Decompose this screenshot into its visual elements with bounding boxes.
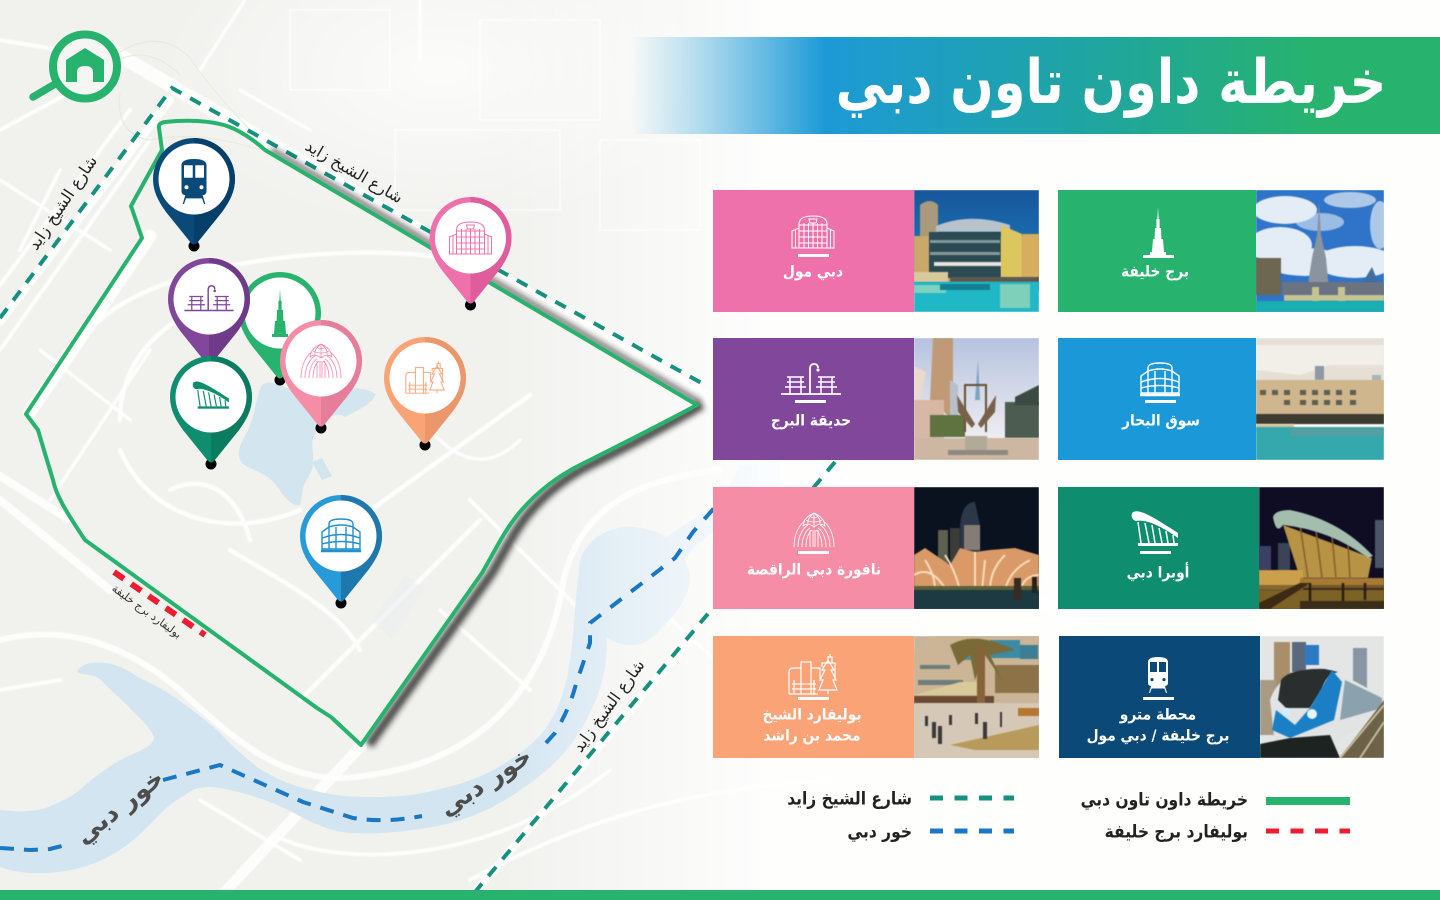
legend: Dubai Creek text: خور دبي [847, 822, 912, 842]
logo: magnifier with house [29, 30, 121, 102]
legend: teal dashes [930, 796, 1014, 800]
title banner [638, 37, 1440, 134]
Dubai Creek dashed route [0, 506, 716, 850]
pin: Dubai Mall [430, 197, 512, 310]
card: Metro station [1059, 636, 1384, 758]
card: Dubai Mall [713, 190, 1039, 312]
photo: Burj Park [914, 338, 1039, 460]
photo: Boulevard [914, 636, 1039, 758]
icon: fountain [794, 512, 834, 547]
water: Dubai creek [0, 462, 780, 873]
photo: Dubai Mall [914, 190, 1039, 312]
photo: Souq Al Bahar [1256, 338, 1384, 460]
photo: Burj Khalifa [1256, 190, 1384, 312]
label: Mohammed Bin Rashid Boulevard [762, 706, 862, 745]
legend: red dashes [1266, 828, 1350, 834]
label: Metro station: برج خليفة / دبي مول [1087, 727, 1229, 745]
pin: Mohammed Bin Rashid Boulevard [384, 337, 466, 450]
Sheikh Zayed Road dashed route [0, 88, 835, 892]
card: Dubai Opera [1058, 487, 1384, 609]
legend: solid green swatch [1266, 797, 1350, 805]
label: Dubai Creek right: خور دبي [434, 741, 537, 823]
label: Mohammed Bin Rashid Boulevard: محمد بن راشد [763, 727, 861, 745]
map routes and labels [0, 85, 836, 890]
pin: metro [153, 138, 235, 252]
legend: Burj Khalifa Boulevard text: بوليفارد برج خليفة [1105, 822, 1248, 842]
label: Sheikh Zayed Road left: شارع الشيخ زايد [24, 152, 102, 254]
icon: Souq building [1140, 362, 1180, 396]
Downtown Dubai boundary [26, 121, 697, 745]
footer bar [0, 890, 1440, 900]
icon: opera [1132, 511, 1178, 546]
title: خريطة داون تاون دبي [836, 48, 1386, 119]
label: Dubai Fountain: نافورة دبي الراقصة [747, 561, 881, 579]
card: Dubai Fountain [713, 487, 1039, 609]
label: Sheikh Zayed Road top: شارع الشيخ زايد [302, 136, 406, 208]
card: Souq Al Bahar [1058, 338, 1384, 460]
photo: Dubai Opera [1259, 487, 1384, 609]
water: Burj lake [239, 383, 376, 505]
legend: blue dashes [930, 828, 1014, 834]
pin: Souq Al Bahar [300, 495, 382, 608]
icon: train [1148, 657, 1168, 693]
legend: Downtown map text: خريطة داون تاون دبي [1081, 790, 1248, 810]
pin: Dubai Fountain [280, 320, 362, 434]
card: Mohammed Bin Rashid Boulevard [713, 636, 1039, 758]
pin: Burj Park [168, 258, 250, 364]
label: Souq Al Bahar: سوق البحار [1122, 412, 1200, 430]
label: Sheikh Zayed Road bottom: شارع الشيخ زايد [569, 656, 649, 756]
icon: boulevard skyline [788, 654, 838, 695]
label: Mohammed Bin Rashid Boulevard: بوليفارد الشيخ [762, 706, 862, 724]
photo: Metro [1260, 636, 1384, 758]
icon: mall [792, 216, 834, 248]
label: Dubai Opera: أوبرا دبي [1127, 564, 1189, 582]
pin: Dubai Opera [170, 356, 252, 470]
icon: park bench and lamp [781, 363, 841, 395]
label: Metro station [1087, 706, 1229, 745]
card: Burj Park [713, 338, 1039, 460]
legend: Sheikh Zayed text: شارع الشيخ زايد [787, 789, 912, 809]
label: Burj Khalifa Boulevard: بوليفارد برج خليفة [109, 582, 184, 641]
label: Burj Khalifa: برج خليفة [1121, 263, 1189, 281]
label: Dubai Mall: دبي مول [783, 263, 843, 281]
Burj Khalifa Boulevard dashed route [114, 572, 205, 635]
label: Metro station: محطة مترو [1120, 706, 1196, 724]
card: Burj Khalifa [1058, 190, 1384, 312]
pin: Burj Khalifa [239, 272, 321, 386]
photo: Dubai Fountain [914, 487, 1039, 609]
icon: Burj Khalifa tower [1150, 208, 1166, 255]
label: Burj Park: حديقة البرج [771, 412, 851, 430]
label: Dubai Creek left: خور دبي [69, 763, 170, 851]
boundary shadow [271, 150, 702, 745]
